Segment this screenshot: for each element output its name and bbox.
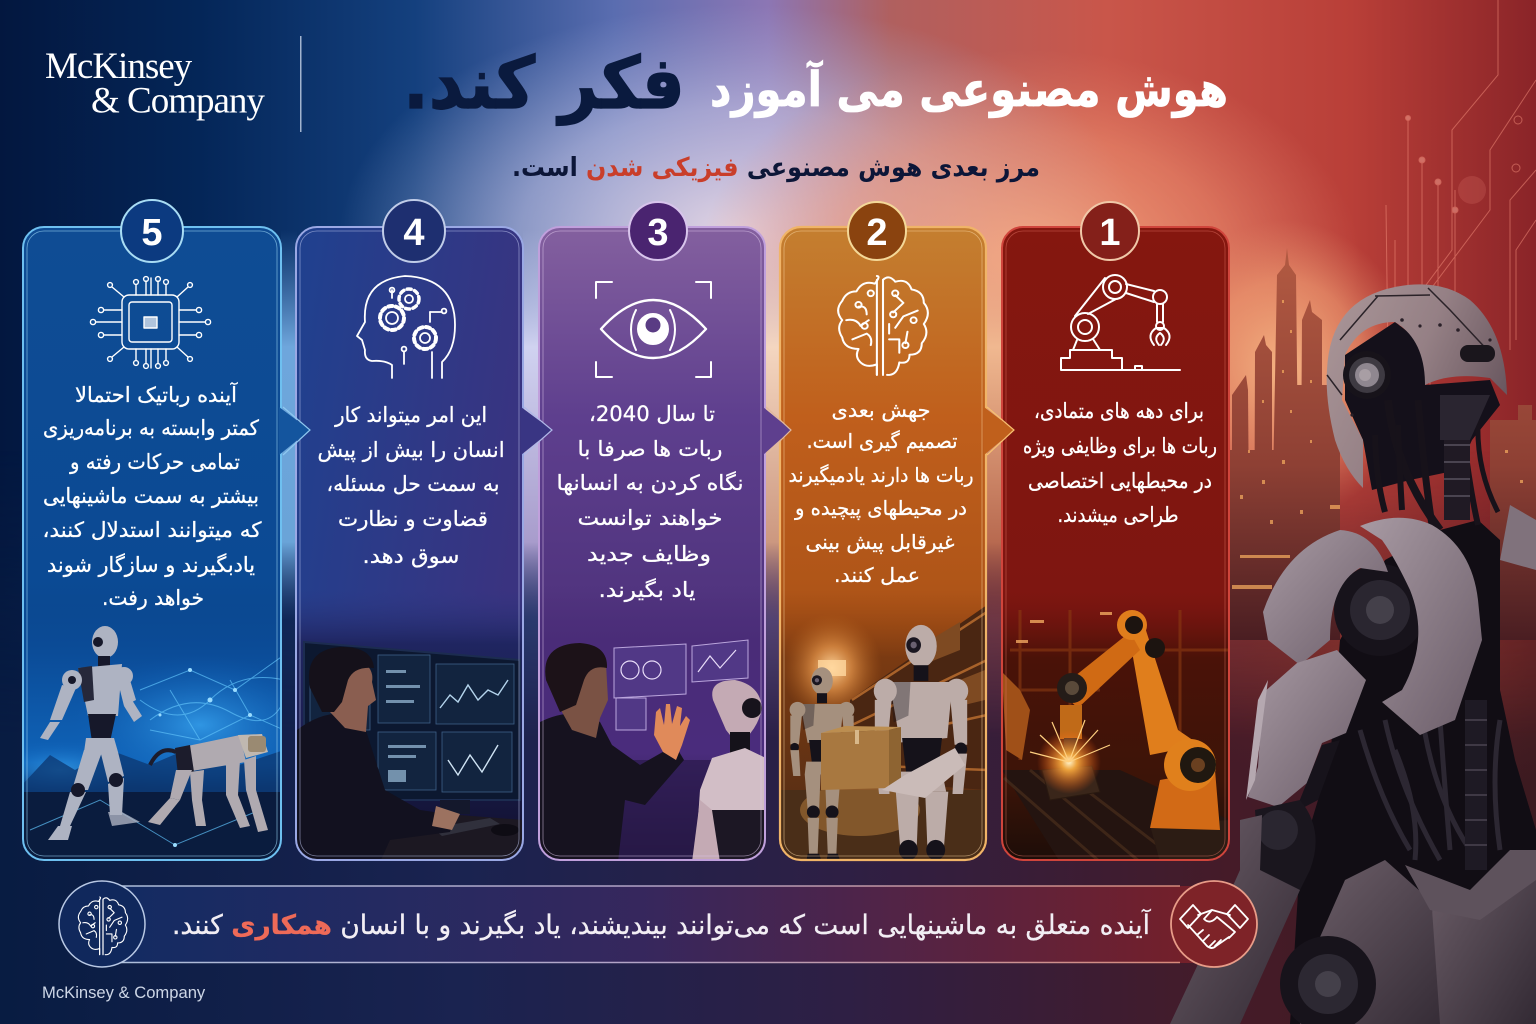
title: هوش مصنوعی می آموزد (710, 60, 1228, 118)
icon: eye (596, 282, 711, 377)
text 2 (788, 398, 974, 587)
box (821, 730, 889, 790)
text 4: به سمت حل مسئله، (326, 472, 500, 496)
background arm (1002, 672, 1030, 760)
monitors (304, 642, 520, 800)
gaps between panels (281, 230, 1003, 620)
text 5: یادبگیرند و سازگار شوند (47, 553, 255, 577)
scene: man and humanoid (540, 640, 764, 859)
scene: warehouse robots (781, 606, 985, 859)
badge 4 (383, 200, 445, 262)
robot hip (1280, 850, 1536, 1024)
text 3: ربات ها صرفا با (578, 437, 722, 461)
text 5: کمتر وابسته به برنامه‌ریزی (43, 416, 259, 440)
arrow 5 to 4 (279, 407, 310, 455)
footer icon: brain (59, 881, 145, 967)
robot helmet (1327, 284, 1507, 488)
text 1: در محیطهایی اختصاصی (1028, 469, 1212, 493)
robot dog (148, 734, 268, 832)
text 3 (556, 402, 744, 602)
man (540, 714, 684, 862)
text 2: جهش بعدی (832, 398, 930, 422)
text 1: برای دهه های متمادی، (1034, 399, 1204, 423)
icon: brain (838, 276, 928, 375)
skyline (1140, 248, 1536, 800)
scene: man at monitors (296, 590, 524, 862)
robot upper arm (1246, 650, 1366, 812)
badge 4: 4 (403, 212, 425, 254)
near robot (874, 624, 968, 859)
badge 2 (848, 202, 906, 260)
icon: head with gears (357, 276, 455, 378)
badge 1 (1081, 202, 1139, 260)
subtitle: مرز بعدی هوش مصنوعی فیزیکی شدن است. (512, 153, 1040, 183)
text 2: عمل کنند. (834, 563, 920, 587)
footer message: آینده متعلق به ماشینهایی است که می‌توانند بیندیشند، یاد بگیرند و با انسان همکاری کنند. (172, 909, 1151, 941)
title: فکر کند. (403, 41, 685, 126)
badge 1: 1 (1099, 212, 1121, 254)
man (297, 714, 455, 862)
text 1: طراحی میشدند. (1058, 503, 1178, 527)
circuit lines top right (1386, 0, 1536, 420)
badge 3: 3 (647, 212, 669, 254)
text 5: خواهد رفت. (102, 586, 204, 610)
text 5: بیشتر به سمت ماشینهایی (43, 484, 259, 508)
big robot figure (1170, 284, 1536, 1024)
logo: McKinsey (45, 46, 193, 87)
far robot (790, 667, 854, 862)
text 1: ربات ها برای وظایفی ویژه (1023, 434, 1217, 458)
badge 5: 5 (141, 212, 163, 254)
robot torso and spine (1290, 520, 1536, 1024)
text 5: تمامی حرکات رفته و (69, 450, 240, 474)
sparks (1037, 730, 1101, 794)
text 5: آینده رباتیک احتمالا (75, 382, 238, 407)
badge 5 (121, 200, 183, 262)
text 3: تا سال 2040، (589, 402, 715, 426)
text 4: این امر میتواند کار (334, 403, 487, 427)
text 2: غیرقابل پیش بینی (806, 530, 954, 555)
text 3: یاد بگیرند. (598, 578, 696, 602)
robot neck and cables (1345, 322, 1500, 530)
arrow 3 to 2 (763, 407, 791, 455)
footer brand: McKinsey & Company (42, 983, 206, 1002)
header divider (300, 36, 302, 132)
badge 2: 2 (866, 212, 888, 254)
text 3: خواهند توانست (578, 506, 722, 530)
arrow 2 to 1 (984, 407, 1014, 455)
panel 3: learn by watching (539, 202, 770, 862)
scene: humanoid and robot dog (24, 626, 280, 859)
text 4: قضاوت و نظارت (338, 507, 488, 531)
panel 5: future robotics (22, 199, 282, 861)
text 4: انسان را بیش از پیش (318, 438, 504, 462)
text 4 (318, 403, 504, 568)
robot shoulder (1263, 505, 1536, 735)
text 2: ربات ها دارند یادمیگیرند (788, 463, 974, 487)
footer banner (59, 881, 1257, 967)
logo (45, 46, 265, 122)
badge 3 (629, 202, 687, 260)
footer icon: handshake (1171, 881, 1257, 967)
robot forearm (1170, 800, 1316, 1024)
humanoid robot walking (40, 626, 142, 840)
panel 4: human work (296, 200, 524, 862)
text 3: نگاه کردن به انسانها (556, 471, 744, 495)
text 5 (42, 382, 262, 610)
scene: welding robot arm (1002, 590, 1230, 862)
text 3: وظایف جدید (587, 542, 711, 566)
text 2: در محیطهای پیچیده و (794, 496, 967, 521)
panel 2: decision making (780, 202, 987, 928)
text 5: که میتوانند استدلال کنند، (42, 518, 262, 542)
text 1 (1023, 399, 1217, 527)
panel 1: specialised robots (1002, 202, 1230, 862)
text 4: سوق دهد. (362, 544, 460, 568)
icon: robot arm (1061, 275, 1180, 370)
arrow 4 to 3 (521, 407, 552, 455)
hologram panels (614, 640, 748, 730)
text 2: تصمیم گیری است. (806, 429, 958, 453)
icon: chip (90, 277, 211, 368)
humanoid (692, 680, 770, 862)
orange robot arm (1057, 610, 1230, 862)
logo: & Company (91, 80, 265, 122)
title (403, 41, 1228, 126)
